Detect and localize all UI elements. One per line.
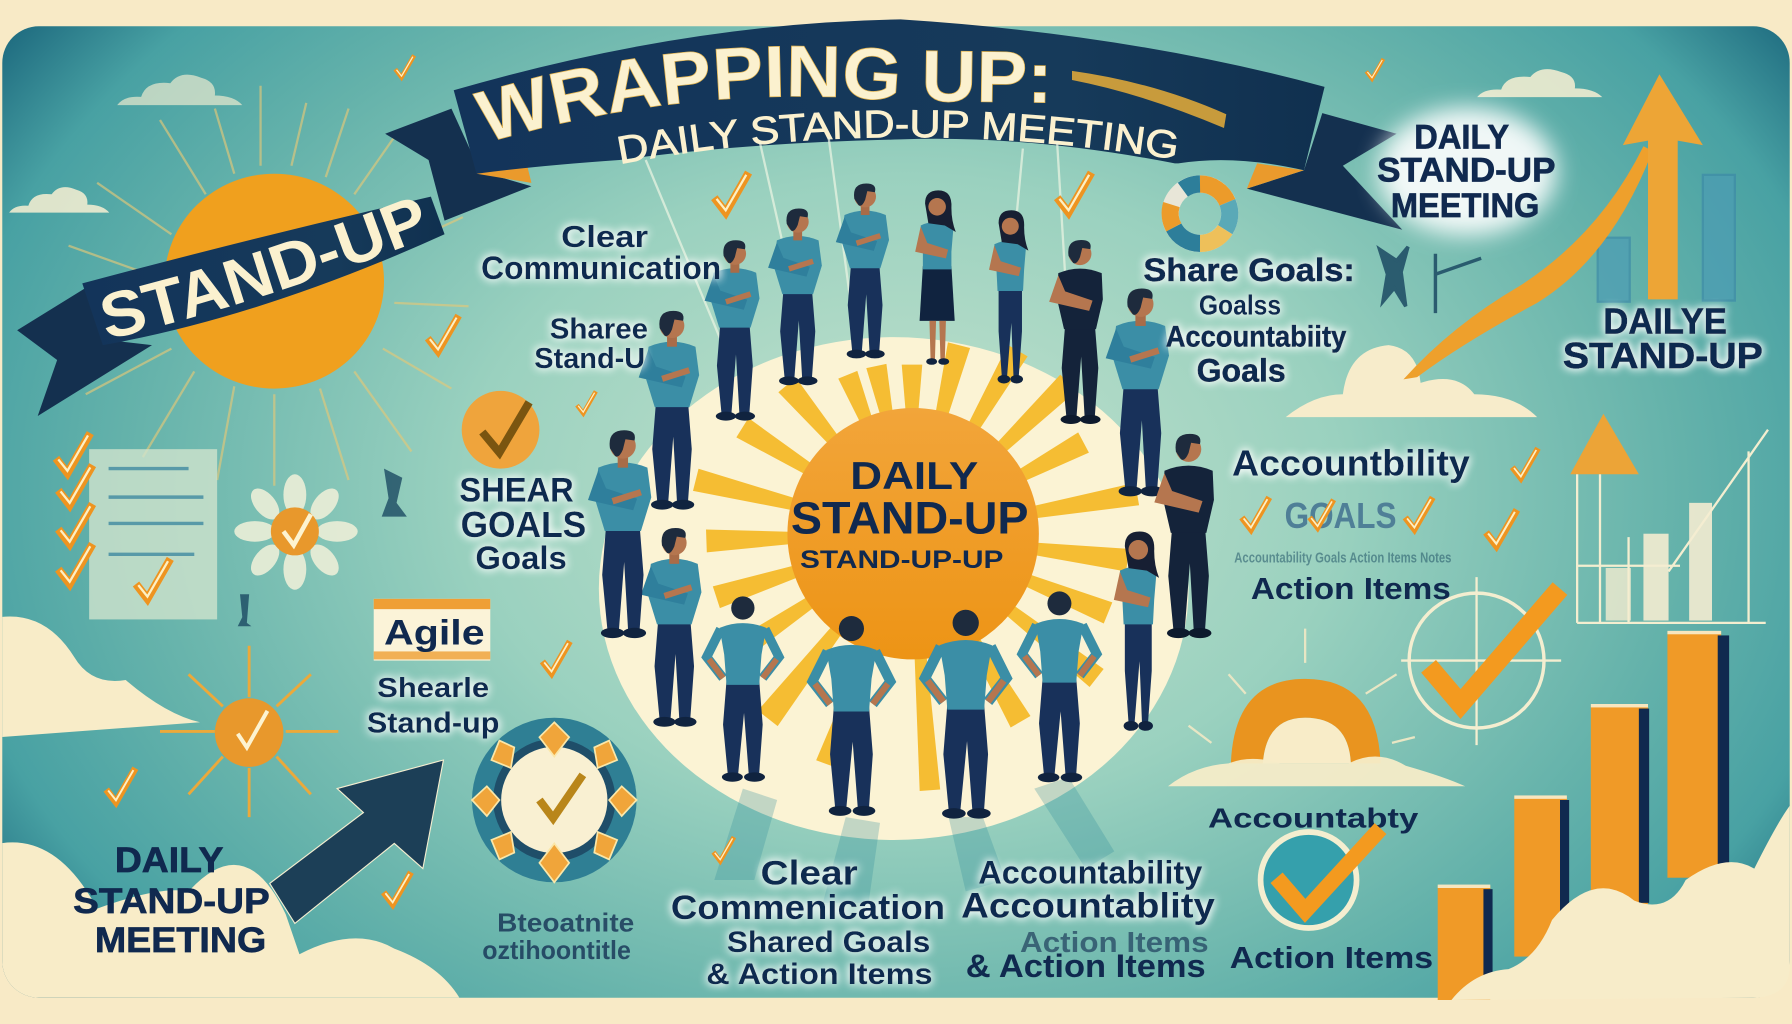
label: clear communication bottom: & Action Items [706, 958, 933, 991]
label: agile tag: Agile [384, 613, 485, 653]
label: garbled small text [482, 907, 634, 965]
person 7 [1106, 289, 1169, 496]
label: goals faded: GOALS [1285, 495, 1397, 536]
label: shear goals: GOALS [461, 504, 586, 545]
label: shared stand-up: Stand-U [534, 343, 645, 375]
cloud: top left [117, 75, 242, 105]
person 6 [1049, 240, 1103, 424]
stage shadows [714, 777, 1114, 903]
label: garbled small text: oztihoontitle [482, 935, 631, 965]
person 3 [836, 184, 889, 358]
check: right of goals [1486, 510, 1517, 546]
central sun label [791, 455, 1029, 574]
icon: orange check badge [462, 391, 539, 469]
label: accountability bottom [961, 854, 1215, 984]
label: daily stand-up right: STAND-UP [1563, 335, 1763, 376]
label: clear communication bottom: Commenication [671, 889, 945, 927]
check: top left yellow [395, 55, 414, 77]
check: top right yellow [1366, 59, 1383, 79]
arrow: vertical up [1623, 74, 1703, 299]
check: by dark arrow [384, 872, 411, 904]
check: list 5 [136, 559, 170, 599]
central sun disc [787, 408, 1039, 659]
cloud: under rising arrow [1286, 345, 1537, 417]
icon: half sun on cloud [1168, 629, 1465, 786]
label: daily stand-up meeting top right [1377, 119, 1555, 225]
cloud: front of bars [1451, 806, 1790, 1000]
icon: donut chart [1170, 184, 1230, 243]
label: daily stand-up right: DAILYE [1603, 301, 1727, 342]
arrow: dark diagonal [270, 760, 443, 923]
label: share goals column: Share Goals: [1143, 252, 1355, 288]
right banner tail [1247, 113, 1402, 230]
check: goals right [1405, 497, 1433, 529]
arrow: rising curve [1403, 146, 1653, 379]
check: goals mid [1310, 500, 1334, 528]
label: accountability bottom: Accountablity [961, 886, 1215, 926]
check: list 3 [58, 504, 93, 544]
team circle [588, 184, 1214, 819]
label: shearle stand-up [367, 672, 499, 740]
label: action items lower: Action Items [1230, 940, 1433, 975]
label: shearle stand-up: Shearle [377, 672, 489, 703]
chart: faint blue bars [1598, 175, 1735, 302]
cloud: top right [1477, 69, 1602, 97]
icon: flower with check [234, 474, 358, 590]
check: above team left [714, 173, 749, 213]
ribbon: STAND-UP tail [17, 286, 152, 416]
check: small by badge [577, 391, 596, 413]
central sun label: STAND-UP-UP [800, 546, 1003, 574]
label: action items upper: Action Items [1251, 571, 1451, 606]
person 5 [989, 210, 1028, 384]
check: list 2 [58, 465, 93, 505]
icon: badge with stars and check [472, 718, 637, 882]
label: share goals column: Goalss [1199, 289, 1281, 320]
right banner fold: orange [1247, 163, 1304, 189]
person 12 [812, 616, 890, 816]
person 11 [925, 610, 1006, 819]
title: WRAPPING UP: [472, 46, 1046, 140]
label: shear goals [459, 472, 586, 576]
ribbon: STAND-UP band [82, 197, 445, 345]
left sun rays [69, 86, 469, 486]
faint light rays behind the team [646, 137, 1069, 366]
white glow behind daily stand-up meeting [1378, 107, 1557, 235]
check: list 4 [58, 544, 93, 584]
check: goals left [1242, 497, 1269, 529]
label: daily stand-up meeting bottom left: STAND-UP [73, 881, 270, 921]
label: daily stand-up meeting top right: STAND-UP [1377, 152, 1555, 190]
person 9 [1114, 531, 1159, 731]
subtitle: DAILY STAND-UP MEETING [618, 110, 1177, 164]
person 2 [768, 209, 822, 385]
central sun label: STAND-UP [791, 493, 1029, 544]
check: bottom centre [713, 837, 734, 861]
label: accountability right: Accountbility [1232, 442, 1470, 483]
label: daily stand-up meeting bottom left: MEETING [95, 920, 266, 960]
banner fold: orange [477, 160, 531, 183]
label: daily stand-up meeting bottom left: DAILY [115, 840, 224, 880]
central sun label: DAILY [850, 455, 978, 498]
label: clear communication: Clear [561, 219, 648, 254]
label: shared stand-up [534, 313, 648, 375]
icon: target with big check [1401, 577, 1561, 745]
cream circle stage [599, 337, 1189, 840]
person 10 [1022, 591, 1097, 782]
doodle: dark silhouette near rising arrow [1379, 247, 1481, 313]
icon: small sun with check [160, 646, 338, 817]
check: under agile [542, 641, 570, 673]
label: share goals column: Goals [1197, 353, 1286, 389]
label: accountability bottom: Action Items [1020, 927, 1209, 959]
person 15 [588, 430, 651, 638]
check: lower left [106, 768, 135, 802]
icon: circled check [1261, 829, 1381, 928]
person 13 [707, 596, 779, 782]
label: daily stand-up meeting bottom left [73, 840, 270, 960]
title banner [454, 19, 1325, 174]
label: share goals column: Accountabiity [1166, 320, 1347, 353]
person 1 [705, 240, 759, 421]
label: faint text strip: Accountability Goals Action Items Notes [1234, 550, 1451, 566]
ribbon text: STAND-UP: STAND-UP [102, 200, 421, 336]
label: garbled small text: Bteoatnite [497, 907, 634, 937]
label: clear communication bottom: Clear [761, 855, 858, 893]
label: shear goals: SHEAR [459, 472, 574, 510]
label: accountabty: Accountabty [1208, 802, 1419, 833]
cloud: upper left small [9, 187, 109, 213]
label: daily stand-up right [1563, 301, 1763, 376]
checklist document [56, 433, 217, 619]
person 4 [915, 190, 956, 365]
chart: triangle and grid [1570, 414, 1768, 623]
label: shearle stand-up: Stand-up [367, 708, 499, 740]
person 16 [639, 311, 699, 510]
label: daily stand-up meeting top right: MEETING [1391, 187, 1539, 225]
banner highlight streak [1072, 71, 1226, 128]
person 14 [641, 528, 701, 727]
label: clear communication [481, 219, 721, 286]
label: shear goals: Goals [475, 540, 567, 576]
check: accountability [1512, 448, 1538, 478]
label: share goals column [1143, 252, 1355, 389]
label: accountability bottom: Accountability [978, 854, 1202, 890]
banner fold: connecting dark piece [385, 109, 531, 221]
label: clear communication bottom [671, 855, 945, 991]
chart: bottom orange bars [1438, 631, 1729, 1000]
doodle: trophy near flower [238, 469, 407, 626]
label: clear communication bottom: Shared Goals [727, 926, 930, 959]
label: daily stand-up meeting top right: DAILY [1414, 119, 1509, 157]
check: above team right [1057, 173, 1091, 213]
check: near left sun [428, 316, 459, 352]
label: shared stand-up: Sharee [550, 313, 648, 345]
label: clear communication: Communication [481, 250, 721, 286]
check: list 1 [56, 433, 90, 473]
cloud: bottom left [0, 617, 459, 998]
label: accountability bottom: & Action Items [966, 948, 1206, 984]
person 8 [1154, 434, 1214, 638]
label: agile tag [374, 599, 490, 661]
sun rays: central [693, 342, 1139, 791]
left sun disc [165, 174, 384, 389]
